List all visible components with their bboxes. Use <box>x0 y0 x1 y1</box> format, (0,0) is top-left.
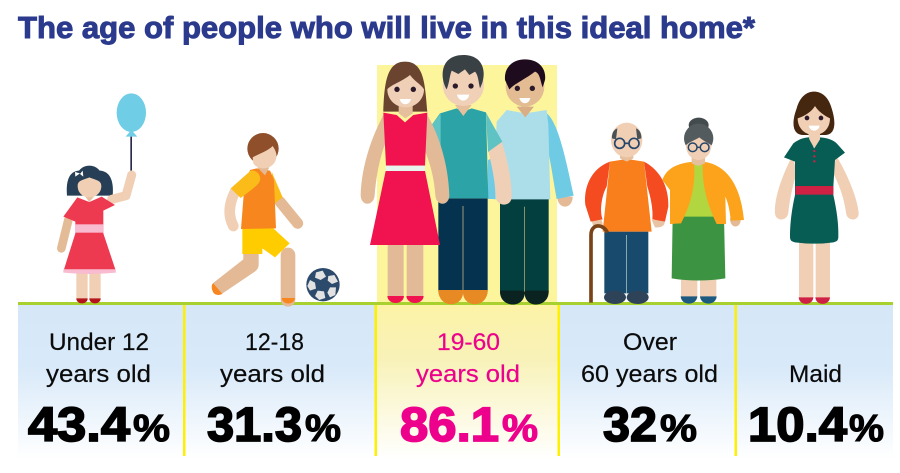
stat: under 12 years old: years old <box>46 361 151 388</box>
illustration: girl with balloon <box>61 93 146 303</box>
stat: 12-18 years old: 12-18 <box>245 329 304 356</box>
old man with cane <box>585 123 668 304</box>
stat: 12-18 years old: years old <box>220 361 325 388</box>
stat: under 12 years old: % <box>133 408 170 450</box>
highlight behind adults <box>377 65 557 303</box>
stat: under 12 years old: Under 12 <box>49 329 149 356</box>
stat: over 60 years old <box>581 329 718 452</box>
stat: over 60 years old: % <box>660 408 697 450</box>
stat: maid: % <box>849 408 884 450</box>
woman in pink dress <box>361 62 449 303</box>
stat: under 12 years old: 43.4 <box>28 399 130 452</box>
stat: over 60 years old: 32 <box>603 399 657 452</box>
stat: 19-60 years old <box>400 329 538 452</box>
stat: 12-18 years old: % <box>305 408 341 450</box>
illustration: adults aged 19-60 <box>361 55 574 305</box>
stat: maid <box>748 361 884 452</box>
stat: 19-60 years old: % <box>502 408 538 450</box>
stat: 19-60 years old: years old <box>416 361 520 388</box>
illustration: boy kicking ball <box>212 133 340 303</box>
column dividers <box>183 305 737 456</box>
old woman <box>662 118 744 304</box>
stat: 12-18 years old: 31.3 <box>207 399 302 452</box>
stat: maid: Maid <box>789 361 842 388</box>
illustration: maid <box>775 92 859 304</box>
illustration: elderly couple <box>585 118 744 304</box>
panel: age band backgrounds <box>18 304 893 459</box>
stat: over 60 years old: Over <box>623 329 677 356</box>
ground line <box>18 302 893 305</box>
stat: under 12 years old <box>28 329 170 452</box>
stat: 12-18 years old <box>207 329 341 452</box>
man in teal <box>432 55 512 304</box>
man in light blue <box>493 59 574 305</box>
stat: 19-60 years old: 86.1 <box>400 399 499 452</box>
stat: over 60 years old: 60 years old <box>581 361 718 388</box>
title: The age of people who will live in this ideal home* <box>18 10 756 45</box>
stat: 19-60 years old: 19-60 <box>437 329 500 356</box>
stat: maid: 10.4 <box>748 399 847 452</box>
